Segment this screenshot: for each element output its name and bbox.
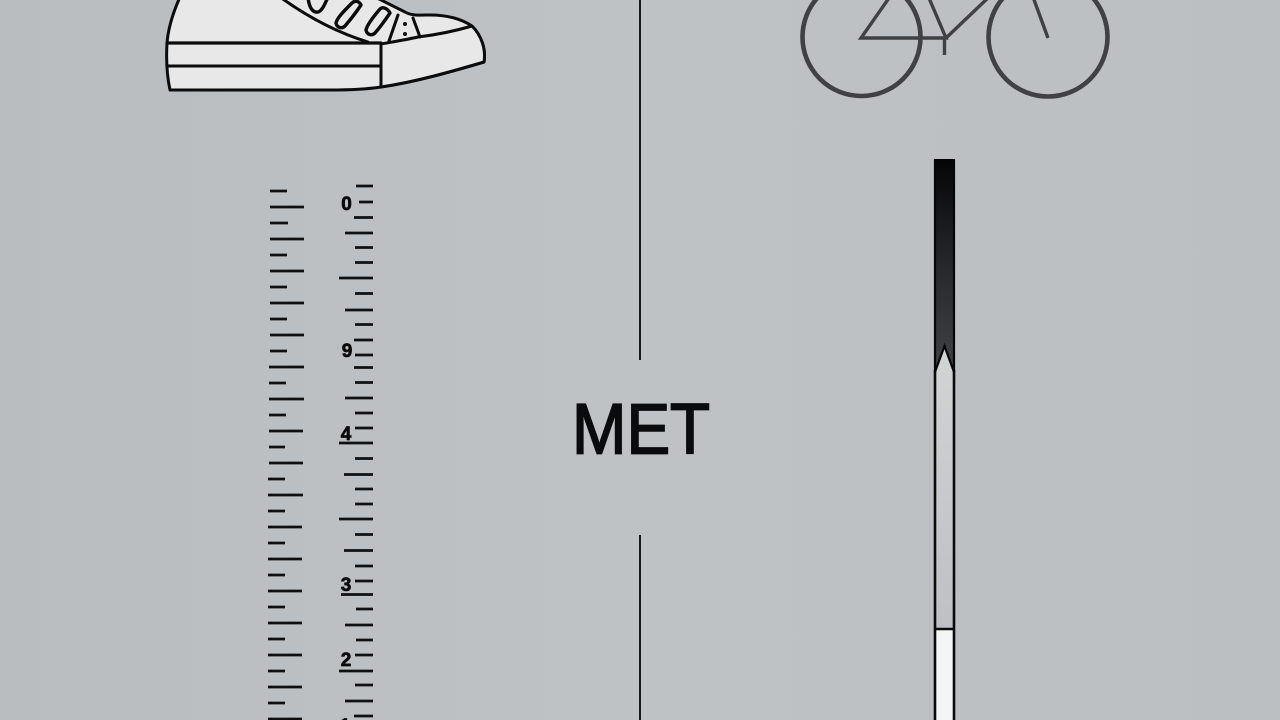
ruler numbers: 9 (342, 341, 352, 362)
center divider bottom (639, 535, 641, 720)
ruler numbers: 2 (341, 650, 351, 671)
center divider top (639, 0, 641, 360)
bar lower fill (935, 340, 954, 630)
right ruler scale (339, 186, 373, 720)
title: MET: MET (572, 390, 710, 470)
ruler numbers: 4 (341, 424, 352, 445)
ruler numbers: 0 (341, 194, 352, 215)
icon: sneaker (167, 0, 484, 90)
bar outline (935, 370, 954, 720)
vertical progress bar (934, 159, 955, 720)
ruler ticks (339, 186, 373, 716)
left ruler scale (268, 191, 304, 719)
bar white base (935, 630, 954, 720)
ruler numbers: 3 (341, 575, 351, 596)
bar dark fill with pointed end (934, 159, 955, 376)
ruler numbers (340, 194, 352, 720)
icon: bicycle (802, 0, 1108, 96)
